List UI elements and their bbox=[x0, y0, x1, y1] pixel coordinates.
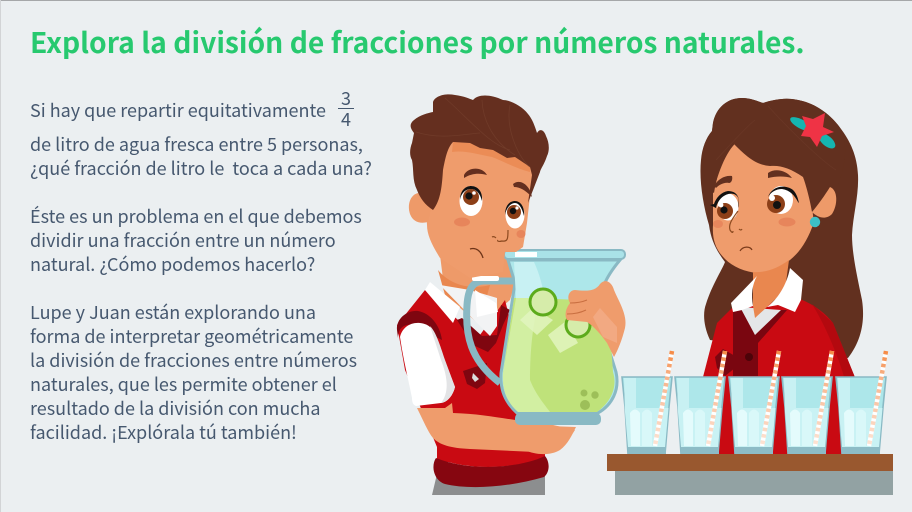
text block: Lupe and Juan: Lupe y Juan están explorando una forma de interpretar geométricamente la división de fracciones entre números naturales, que les permite obtener el resultado de la división con mucha facilidad. ¡Explórala tú también! bbox=[30, 299, 357, 445]
table top bbox=[607, 454, 893, 471]
waist band bbox=[433, 456, 549, 487]
hand under pitcher bbox=[520, 425, 576, 454]
bubbles bbox=[580, 390, 588, 396]
table base bbox=[615, 471, 893, 495]
eyes bbox=[718, 194, 738, 220]
pitcher bbox=[501, 250, 625, 425]
hair bbox=[410, 94, 549, 210]
earring bbox=[810, 217, 820, 227]
cheeks bbox=[454, 218, 470, 226]
rim bbox=[504, 250, 625, 259]
lime slices bbox=[530, 289, 556, 315]
nose and mouth bbox=[730, 211, 742, 232]
glass 2 bbox=[675, 351, 725, 454]
shirt bbox=[440, 285, 497, 336]
eyes bbox=[460, 186, 482, 216]
nose and mouth bbox=[492, 230, 508, 241]
face bbox=[425, 130, 535, 278]
fraction three quarters bbox=[338, 85, 354, 132]
fraction three quarters: 3 bbox=[341, 85, 351, 111]
ice cubes bbox=[520, 308, 553, 335]
girl button bbox=[745, 353, 753, 361]
face bbox=[713, 140, 814, 273]
text block: question first line: Si hay que repartir equitativamente bbox=[30, 97, 326, 123]
text block: question continuation: de litro de agua fresca entre 5 personas, ¿qué fracción de litro le toca a cada una? bbox=[30, 131, 372, 181]
hair clip bbox=[788, 113, 838, 151]
vest bbox=[397, 290, 543, 462]
cheeks bbox=[778, 218, 796, 226]
pitcher handle bbox=[467, 281, 516, 383]
badge bbox=[463, 363, 487, 389]
hand on pitcher bbox=[566, 281, 626, 357]
title: Explora la división de fracciones por números naturales. bbox=[30, 21, 805, 62]
brows bbox=[464, 169, 487, 178]
brows bbox=[714, 176, 732, 188]
glass 1 bbox=[622, 351, 672, 454]
base bbox=[515, 413, 601, 425]
neck bbox=[440, 250, 525, 325]
ear bbox=[812, 187, 836, 218]
text block: problem statement: Éste es un problema en el que debemos dividir una fracción entre un número natural. ¿Cómo podemos hacerlo? bbox=[30, 203, 362, 277]
glass 5 bbox=[836, 351, 886, 454]
sleeve bbox=[400, 323, 455, 406]
drinking glasses and table bbox=[607, 351, 893, 495]
forehead shade bbox=[452, 142, 530, 172]
collar bbox=[731, 276, 757, 312]
trousers bbox=[432, 474, 545, 495]
ear bbox=[409, 193, 432, 223]
illustration: girl Lupe bbox=[700, 98, 863, 454]
illustration: boy Juan bbox=[397, 94, 626, 495]
arm bbox=[417, 403, 575, 453]
lower vest bbox=[437, 445, 545, 467]
front hair bbox=[702, 98, 845, 212]
glass 4 bbox=[782, 351, 832, 454]
girl badge bbox=[715, 349, 735, 376]
fraction three quarters: 4 bbox=[341, 106, 351, 132]
glass 3 bbox=[729, 351, 779, 454]
